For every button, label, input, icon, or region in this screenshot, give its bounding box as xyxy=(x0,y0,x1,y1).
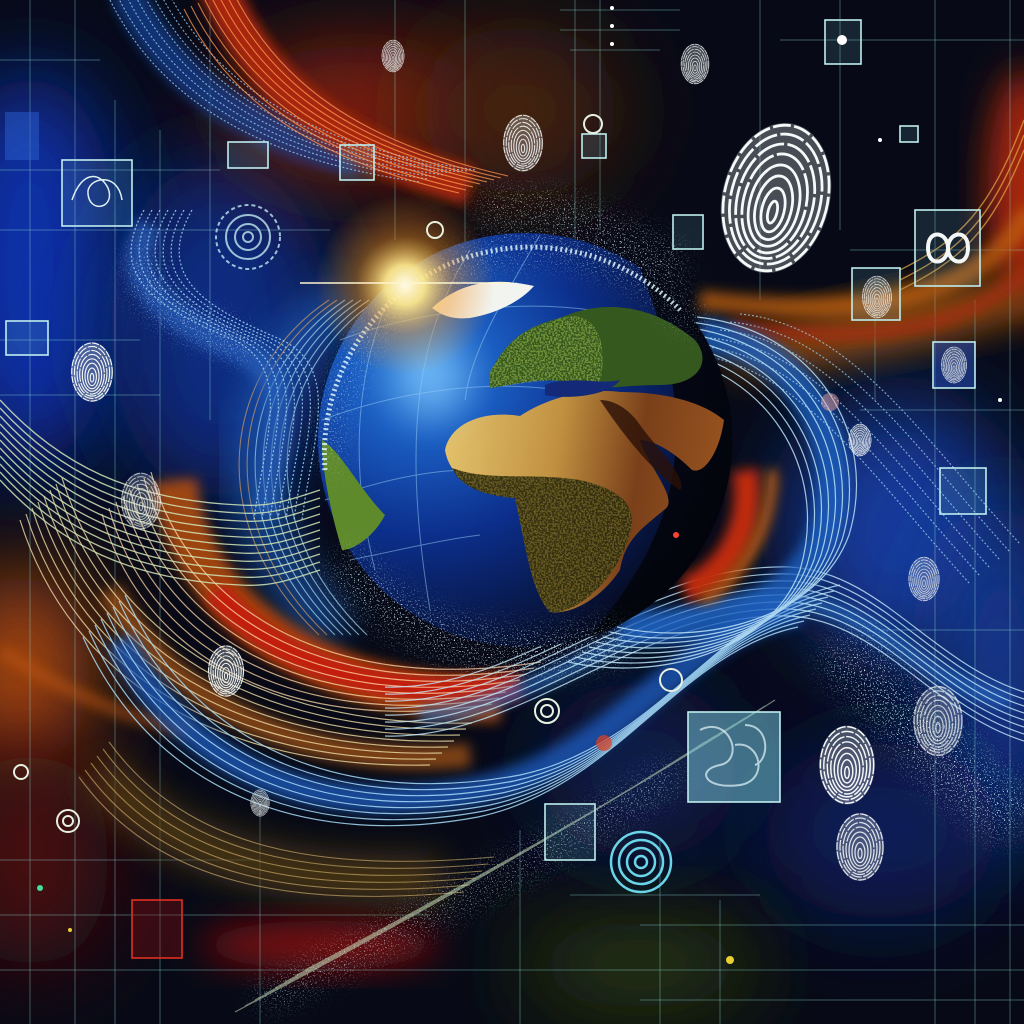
fingerprint: lower left xyxy=(208,645,244,697)
fingerprint: large top right xyxy=(705,111,847,285)
continent: Greenland and ice xyxy=(432,282,534,318)
icon: maze in teal panel xyxy=(700,725,765,786)
globe highlight xyxy=(398,338,466,418)
continent: Europe xyxy=(490,307,702,388)
fingerprint: right blue panel xyxy=(941,347,967,383)
globe sparkle rim xyxy=(324,247,680,470)
fingerprint: bottom right large xyxy=(819,726,875,804)
fingerprint: left stream xyxy=(121,472,161,530)
icon: spiral in panel xyxy=(928,234,968,262)
warm swirl around lower left of globe xyxy=(0,472,541,896)
continent: African green belt xyxy=(452,468,632,612)
pale stream, far left xyxy=(0,400,320,585)
fingerprint: bottom right lower xyxy=(836,813,884,881)
fingerprint: right panel xyxy=(862,276,892,318)
continent: Africa and Middle East xyxy=(445,391,724,612)
particle dust xyxy=(143,208,1020,1000)
globe dark limb xyxy=(590,268,732,637)
fingerprints xyxy=(71,40,967,892)
sun flare xyxy=(300,195,510,375)
fingerprint: left xyxy=(71,342,113,402)
red and blue stream, top xyxy=(110,0,508,193)
continent: South America xyxy=(322,440,385,550)
fingerprint: small lower left xyxy=(250,789,270,817)
continent: Africa speckle xyxy=(452,468,632,612)
rings left of globe xyxy=(239,300,377,635)
orange stream, right xyxy=(700,120,1024,334)
globe graticule xyxy=(322,235,590,610)
fingerprint: bottom centre round xyxy=(611,832,671,892)
fingerprint: right small xyxy=(848,424,872,456)
fingerprint: far right xyxy=(913,686,963,756)
fingerprint: top small two xyxy=(681,44,709,84)
blue rings right of globe xyxy=(568,314,1020,668)
blue swirl, bottom xyxy=(83,567,1024,1012)
small nodes xyxy=(14,115,682,832)
globe xyxy=(318,233,732,647)
fingerprint: right mid xyxy=(908,557,940,601)
globe sphere xyxy=(318,233,732,647)
continent: Red Sea shadow xyxy=(600,400,682,490)
icon: squiggle in top left panel xyxy=(72,177,122,206)
blue wave, left xyxy=(131,210,318,520)
continent: Europe speckle xyxy=(490,316,603,388)
continent: Mediterranean shadow xyxy=(545,380,620,397)
fingerprint: left round xyxy=(216,205,280,269)
fingerprint: top small one xyxy=(381,40,405,72)
fingerprint: top centre xyxy=(503,114,543,172)
